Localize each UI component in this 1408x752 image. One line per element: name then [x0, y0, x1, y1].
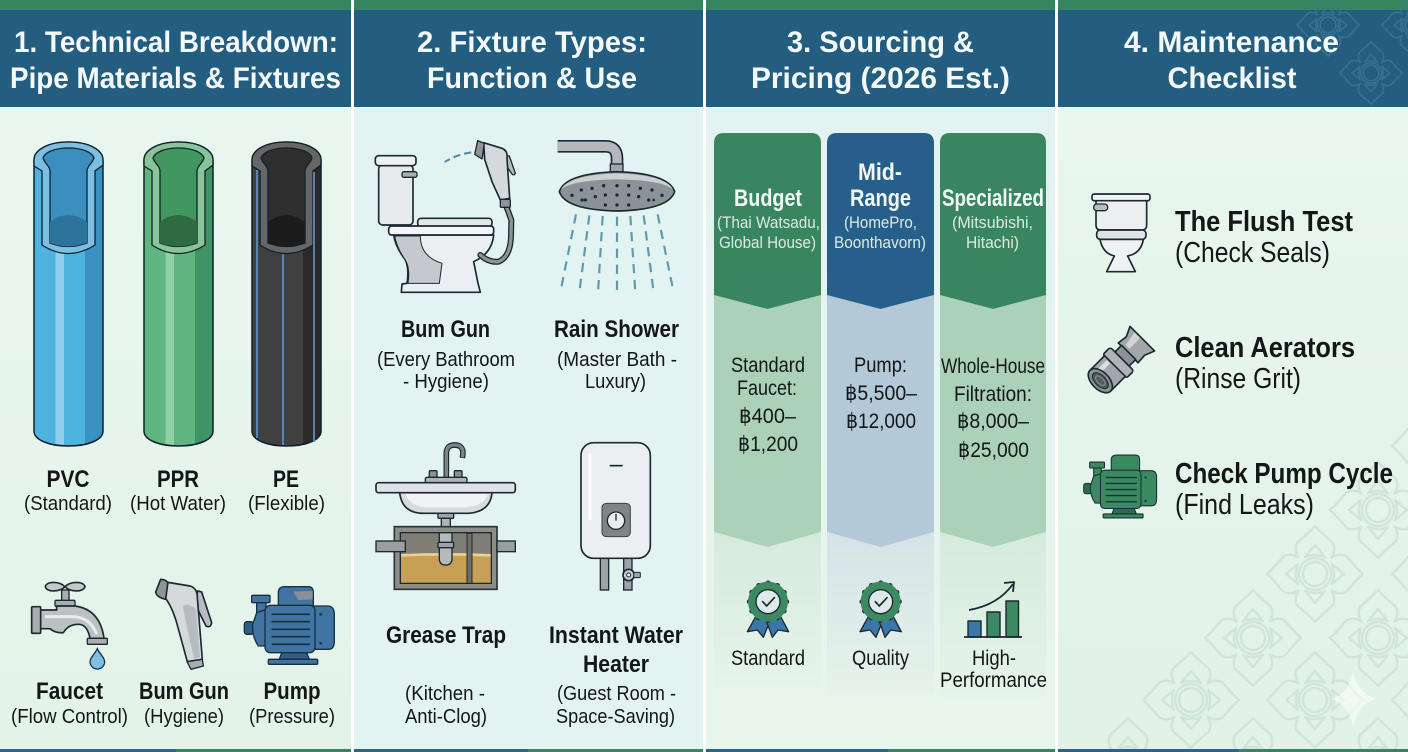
label: rain shower — [554, 316, 679, 393]
label: instant water heater: Instant Water — [549, 622, 683, 649]
specialized heading: (Mitsubishi, — [952, 213, 1033, 232]
panel: technical breakdown background — [0, 108, 351, 749]
icon: toilet with bum gun — [375, 141, 515, 292]
icon: rain shower — [558, 146, 675, 292]
mid-range heading: Boonthavorn) — [834, 233, 926, 252]
label: instant water heater: (Guest Room - — [557, 683, 676, 705]
icon: performance chart — [964, 582, 1022, 637]
heading 2 — [417, 26, 647, 95]
decorative panel pattern — [1109, 398, 1408, 750]
label: high performance: High- — [972, 647, 1016, 670]
heading 1: 1. Technical Breakdown: — [14, 26, 338, 59]
heading 3: Pricing (2026 Est.) — [751, 62, 1010, 95]
label: grease trap: Grease Trap — [386, 622, 506, 649]
pricing column: budget — [714, 133, 821, 690]
specialized price: Filtration: — [954, 383, 1032, 406]
header band 2 — [354, 0, 703, 107]
budget heading: (Thai Watsadu, — [717, 213, 820, 232]
label: instant water heater: Space-Saving) — [556, 706, 675, 728]
header band 4 — [1058, 0, 1408, 107]
heading 3: 3. Sourcing & — [787, 26, 974, 59]
label: rain shower: Rain Shower — [554, 316, 679, 343]
label: instant water heater: Heater — [583, 651, 649, 678]
header band 1 — [0, 0, 351, 107]
pipe: PPR — [144, 142, 213, 450]
budget price: Standard — [731, 354, 805, 377]
checklist: flush test: The Flush Test — [1175, 206, 1353, 238]
icon: checklist toilet — [1092, 194, 1150, 272]
budget price: ฿1,200 — [738, 433, 798, 456]
label: grease trap: Anti-Clog) — [405, 706, 487, 728]
pricing column: mid-range — [827, 133, 934, 695]
budget heading — [717, 185, 820, 252]
label: PVC — [24, 466, 112, 515]
label: quality: Quality — [852, 647, 909, 670]
icon: bum gun — [156, 579, 212, 669]
heading 1: Pipe Materials & Fixtures — [10, 62, 341, 95]
label: high performance: Performance — [940, 669, 1047, 692]
pipe: PVC — [34, 142, 103, 450]
budget heading: Budget — [734, 185, 802, 212]
label: PE: PE — [273, 466, 299, 493]
label: PPR — [130, 466, 226, 515]
heading 2: Function & Use — [427, 62, 637, 95]
checklist: clean aerators — [1175, 332, 1355, 395]
budget heading: Global House) — [719, 233, 816, 252]
label: bum gun fixture: - Hygiene) — [403, 371, 489, 393]
mid-range heading: Mid- — [858, 159, 902, 186]
label: PE — [248, 466, 325, 515]
label: bum gun — [139, 678, 229, 728]
header band 3 — [706, 0, 1055, 107]
label: pump: Pump — [264, 678, 320, 705]
icon: quality rosette — [860, 583, 901, 637]
checklist: pump cycle: (Find Leaks) — [1175, 489, 1314, 521]
label: faucet: (Flow Control) — [11, 706, 128, 728]
budget price: Faucet: — [737, 377, 797, 400]
panel: fixture types background — [354, 108, 703, 749]
mid-range price: Pump: — [854, 354, 907, 377]
specialized heading: Hitachi) — [966, 233, 1019, 252]
label: rain shower: Luxury) — [585, 371, 646, 393]
label: PVC: (Standard) — [24, 493, 112, 515]
mid-range price: ฿5,500– — [845, 382, 917, 405]
checklist: clean aerators: (Rinse Grit) — [1175, 363, 1301, 395]
specialized heading: Specialized — [942, 185, 1044, 212]
label: faucet — [11, 678, 128, 728]
mid-range heading: (HomePro, — [844, 213, 917, 232]
pipe: PE — [252, 142, 321, 450]
bottom strip panel 1 — [0, 749, 351, 752]
specialized price: ฿25,000 — [958, 439, 1029, 462]
label: grease trap — [386, 622, 506, 728]
pricing column: specialized — [940, 133, 1046, 700]
specialized heading — [942, 185, 1044, 252]
bottom strip panel 3 — [706, 749, 1055, 752]
label: bum gun: (Hygiene) — [144, 706, 224, 728]
label: PE: (Flexible) — [248, 493, 325, 515]
label: standard: Standard — [731, 647, 805, 670]
heading 3 — [751, 26, 1010, 95]
panel: sourcing and pricing background — [706, 108, 1055, 749]
icon: aerator — [1082, 326, 1155, 399]
heading 4: 4. Maintenance — [1124, 26, 1339, 59]
label: bum gun fixture: Bum Gun — [401, 316, 490, 343]
mid-range price: ฿12,000 — [846, 410, 916, 433]
checklist: clean aerators: Clean Aerators — [1175, 332, 1355, 364]
mid-range price — [845, 354, 917, 433]
specialized price: Whole-House — [941, 355, 1045, 378]
label: bum gun: Bum Gun — [139, 678, 229, 705]
label: bum gun fixture: (Every Bathroom — [377, 349, 515, 371]
bottom strip panel 4 — [1058, 749, 1408, 752]
label: grease trap: (Kitchen - — [405, 683, 485, 705]
mid-range heading: Range — [850, 185, 911, 212]
sparkle watermark — [1332, 672, 1376, 727]
icon: blue pump — [244, 587, 334, 664]
heading 1 — [10, 26, 341, 95]
specialized price — [941, 355, 1045, 462]
heading 2: 2. Fixture Types: — [417, 26, 647, 59]
label: PVC: PVC — [46, 466, 90, 493]
icon: sink with grease trap — [376, 445, 515, 589]
icon: instant water heater — [581, 443, 650, 590]
checklist: flush test — [1175, 206, 1353, 269]
budget price: ฿400– — [739, 405, 796, 428]
label: instant water heater — [549, 622, 683, 728]
label: pump: (Pressure) — [249, 706, 335, 728]
budget price — [731, 354, 805, 456]
panel: maintenance background — [1058, 108, 1408, 749]
label: rain shower: (Master Bath - — [557, 349, 677, 371]
icon: faucet — [32, 582, 107, 669]
label: PPR: (Hot Water) — [130, 493, 226, 515]
decorative header pattern — [1297, 0, 1408, 104]
specialized price: ฿8,000– — [957, 410, 1029, 433]
checklist: pump cycle — [1175, 458, 1393, 521]
mid-range heading — [834, 159, 926, 252]
label: PPR: PPR — [157, 466, 199, 493]
label: bum gun fixture — [377, 316, 515, 393]
label: high performance — [940, 647, 1047, 692]
bottom strip panel 2 — [354, 749, 703, 752]
icon: standard rosette — [747, 583, 789, 637]
icon: green pump — [1084, 455, 1157, 518]
heading 4: Checklist — [1168, 62, 1297, 95]
label: faucet: Faucet — [36, 678, 103, 705]
label: pump — [249, 678, 335, 728]
checklist: flush test: (Check Seals) — [1175, 237, 1330, 269]
heading 4 — [1124, 26, 1339, 95]
